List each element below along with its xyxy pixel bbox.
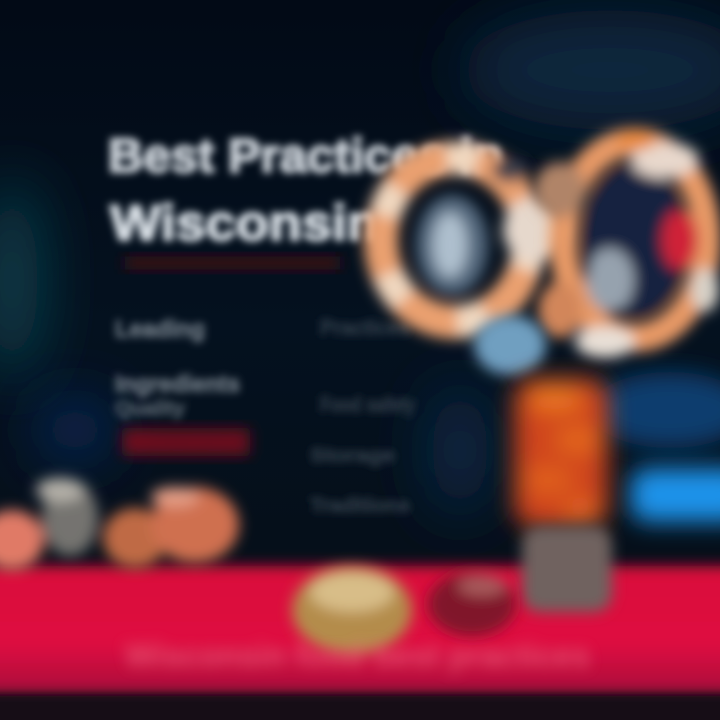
orange sausage stack [514, 378, 608, 528]
left infinity ring [381, 158, 567, 322]
left column text: Leading [115, 316, 205, 343]
right column text: Practices [320, 315, 410, 340]
bun [292, 566, 412, 654]
title [108, 130, 503, 251]
left meat pieces [0, 478, 239, 570]
right infinity ring [534, 130, 719, 358]
grey base [522, 526, 612, 612]
title underline [125, 256, 340, 270]
right column text: Traditions [310, 495, 410, 517]
right column text [310, 315, 416, 517]
left column text: Ingredients [115, 371, 240, 398]
dark red food [428, 572, 516, 636]
left column text [115, 316, 240, 420]
blue glow under crossing [474, 315, 546, 375]
title: Wisconsin [110, 195, 380, 251]
title: Best Practices in [108, 130, 503, 183]
blue button [630, 468, 720, 522]
left column text: Quality [115, 398, 186, 420]
footer text: Wisconsin food best practices [125, 637, 590, 675]
right column text: Food safety [320, 392, 416, 417]
red table band [0, 566, 720, 720]
red label: Wisconsin [125, 430, 245, 455]
right column text: Storage [310, 445, 395, 467]
